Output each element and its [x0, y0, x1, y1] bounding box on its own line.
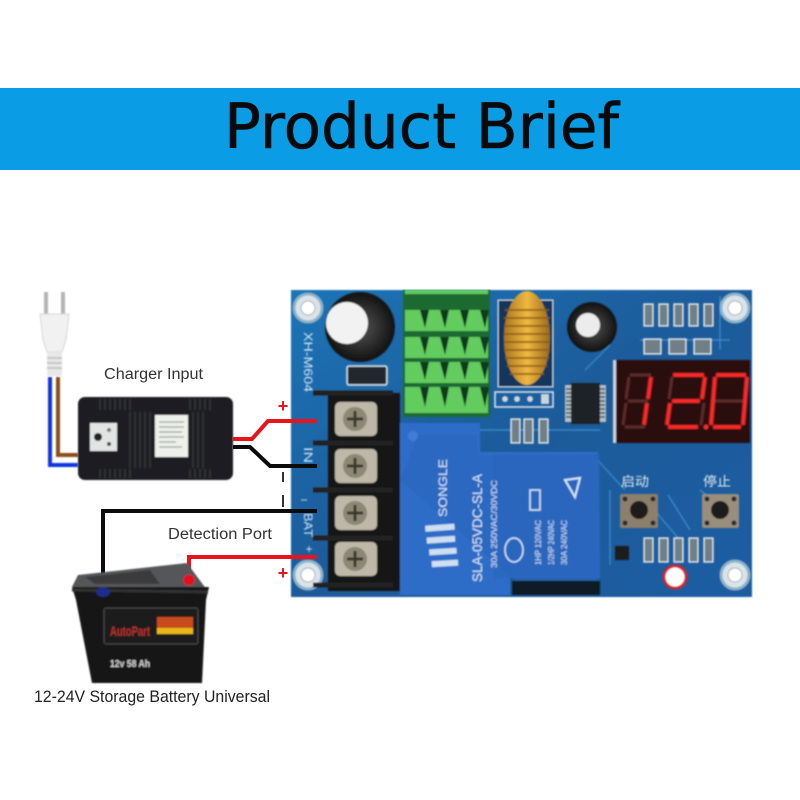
polarity marks: +: [278, 396, 288, 416]
relay: 30A 250VAC/30VDC: [490, 480, 499, 568]
board silkscreen labels: XH-M604: [301, 332, 315, 392]
led ring: [664, 566, 686, 588]
terminal block with screws: [313, 393, 400, 591]
battery wires: [103, 511, 317, 588]
ic chip: [565, 383, 606, 424]
pin header: [495, 392, 553, 407]
relay: 1/2HP 240VAC: [547, 520, 556, 565]
icon: 12v battery: AutoPart: [110, 623, 150, 639]
relay: SLA-05VDC-SL-A: [469, 473, 485, 582]
icon: 12v battery: 12v 58 Ah: [110, 659, 150, 670]
transistor: [615, 546, 629, 560]
detection port label: Detection Port: [168, 526, 273, 543]
component: diode: [347, 366, 387, 385]
polarity marks: +: [278, 563, 288, 583]
stop button: [702, 494, 739, 528]
charger label: Charger Input: [104, 366, 204, 383]
charger output wires: [233, 421, 317, 466]
polarity marks: [278, 396, 288, 583]
capacitor large: [325, 292, 395, 362]
capacitor small: [567, 302, 617, 352]
title banner: [0, 88, 800, 170]
board silkscreen labels: −: [300, 493, 308, 507]
board silkscreen labels: [300, 332, 315, 556]
circuit board module: [291, 290, 752, 597]
bottom diode: [512, 581, 600, 595]
led display showing 12.0: [613, 360, 750, 443]
battery caption: 12-24V Storage Battery Universal: [34, 688, 270, 706]
decimal point: [704, 425, 708, 429]
button labels: 停止: [703, 474, 731, 489]
button labels: 启动: [621, 474, 649, 489]
icon: 12v battery: [72, 563, 209, 683]
title: Product Brief: [224, 90, 621, 163]
button labels: [621, 474, 731, 489]
relay: 1HP 120VAC: [534, 520, 543, 565]
lit digits: [644, 375, 747, 427]
relay: 30A 240VAC: [560, 520, 569, 565]
mounting holes: [294, 294, 749, 589]
start button: [620, 494, 658, 528]
smd components: [511, 304, 713, 562]
inductor coil: [498, 291, 553, 387]
icon: mains plug with wires: [40, 292, 78, 465]
board silkscreen labels: IN: [301, 447, 315, 463]
heatsink: [403, 290, 490, 417]
board silkscreen labels: BAT: [301, 513, 315, 538]
unlit segments: [623, 375, 744, 427]
board silkscreen labels: +: [305, 542, 313, 556]
relay: SONGLE: [436, 459, 450, 517]
icon: charger power adapter: [78, 397, 233, 480]
relay: [400, 423, 600, 595]
